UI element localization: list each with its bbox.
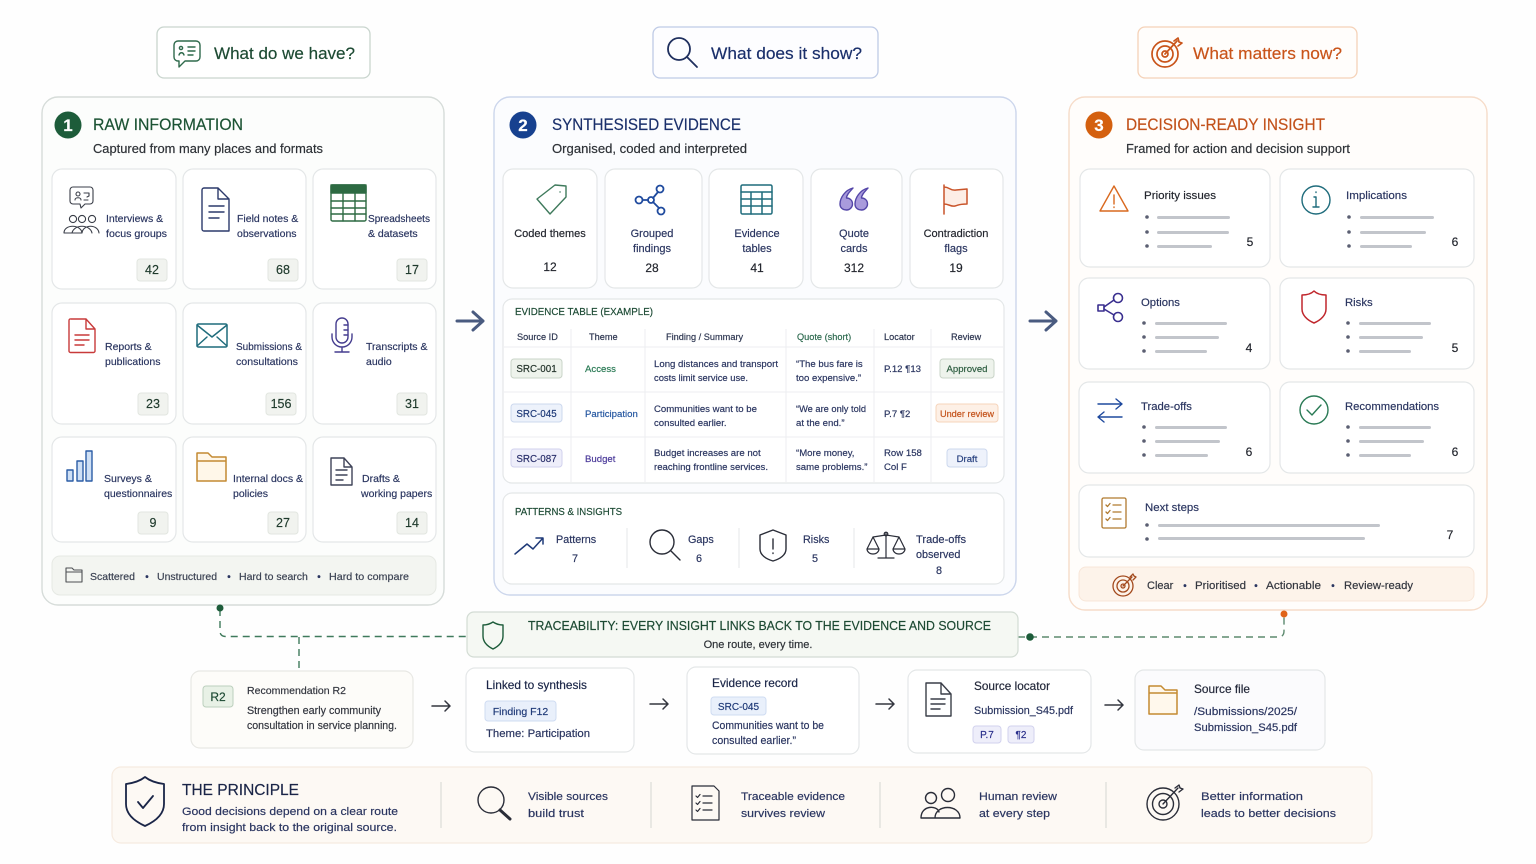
icon: speech bubble (174, 41, 200, 67)
icon: small target (1113, 574, 1136, 596)
card: contradiction flags: Contradiction (924, 228, 988, 240)
icon: tag (537, 185, 566, 214)
label: Interviews & (106, 213, 163, 225)
icon: bar chart (67, 451, 92, 481)
strip: problems: Scattered (90, 571, 135, 583)
stat: trade-offs: Trade-offs (916, 534, 967, 546)
card: contradiction flags: 19 (949, 261, 963, 275)
row SRC-045: Participation (585, 409, 638, 420)
card: drafts: 14 (405, 516, 419, 530)
item: human review: Human review (979, 791, 1058, 803)
icon: source folder (1149, 686, 1177, 714)
row SRC-001: costs limit service use. (654, 373, 748, 384)
strip: qualities: • (1331, 580, 1335, 592)
number badge 3 (1086, 112, 1112, 138)
flow card: linked to synthesis: Linked to synthesis (486, 679, 587, 692)
item: traceable evidence: survives review (741, 808, 826, 820)
icon: principle target (1147, 785, 1183, 820)
card: submissions (183, 303, 306, 424)
card: quote cards: 312 (844, 261, 864, 275)
item: human review: at every step (979, 808, 1050, 820)
flow card: evidence record: Evidence record (712, 677, 798, 690)
card: drafts (313, 437, 436, 542)
stat: patterns (515, 534, 597, 565)
item: traceable evidence: Traceable evidence (741, 791, 845, 803)
flow card: evidence record (687, 667, 859, 754)
row SRC-087: reaching frontline services. (654, 462, 768, 473)
card: field notes (183, 169, 306, 289)
flow card: linked to synthesis: Theme: Participation (486, 728, 590, 740)
flow card: source file: Submission_S45.pdf (1194, 722, 1297, 734)
arrow: raw to synthesised (457, 312, 483, 330)
table header: Locator (884, 332, 915, 342)
flow arrow 2 (650, 699, 668, 709)
icon: shield alert (760, 530, 786, 561)
subheading: Framed for action and decision support (1126, 141, 1350, 156)
row SRC-045: Under review (940, 409, 994, 419)
heading: RAW INFORMATION (93, 115, 243, 134)
stat: trade-offs: 8 (936, 565, 942, 577)
card: recommendations: Recommendations (1345, 401, 1439, 413)
label: What does it show? (711, 44, 862, 63)
heading: SYNTHESISED EVIDENCE (552, 115, 741, 134)
banner title: TRACEABILITY: EVERY INSIGHT LINKS BACK TO THE EVIDENCE AND SOURCE (528, 619, 991, 633)
card: spreadsheets: 17 (405, 263, 419, 277)
icon: red shield (1302, 291, 1326, 323)
panel: the principle (112, 767, 1372, 843)
table header: Quote (short) (797, 332, 851, 342)
icon: flag (944, 185, 967, 214)
stat: trade-offs (867, 532, 967, 577)
strip: qualities: Clear (1147, 580, 1174, 592)
row SRC-087: same problems.” (796, 462, 867, 473)
row SRC-045: at the end.” (796, 418, 845, 429)
card: interviews (52, 169, 176, 289)
number badge 1: 1 (63, 116, 73, 135)
chip R2: R2 (210, 690, 226, 704)
icon: red document (69, 319, 95, 352)
icon: folder (197, 453, 226, 481)
card: quote cards: Quote (839, 228, 869, 240)
card: evidence tables: Evidence (734, 228, 780, 240)
card: implications (1280, 169, 1474, 267)
card: options: Options (1141, 297, 1180, 309)
stat: risks (760, 530, 830, 565)
row SRC-087: Budget (585, 454, 616, 465)
icon: small folder (66, 568, 82, 582)
card: evidence tables: 41 (750, 261, 764, 275)
card: recommendations (1280, 382, 1474, 473)
icon: principle checklist (692, 786, 719, 820)
card: next steps: Next steps (1145, 502, 1199, 514)
stat: risks: Risks (803, 534, 830, 546)
row SRC-045: Communities want to be (654, 404, 757, 415)
row SRC-001: Long distances and transport (654, 359, 778, 370)
panel: decision-ready insight (1069, 97, 1487, 610)
card: quote cards: cards (841, 243, 868, 255)
icon: branching options (1098, 294, 1122, 322)
principle heading: THE PRINCIPLE (182, 782, 299, 799)
flow arrow 4 (1105, 700, 1123, 710)
row SRC-087: Col F (884, 462, 907, 473)
strip: problems (52, 556, 436, 595)
strip: problems: Hard to search (239, 571, 308, 583)
icon: microphone (332, 318, 352, 352)
icon: magnifier (668, 38, 697, 67)
flow card: recommendation R2: Strengthen early community (247, 705, 382, 717)
table header: Source ID (517, 332, 558, 342)
strip: qualities (1079, 567, 1474, 601)
card: risks: 5 (1452, 341, 1459, 355)
item: human review (921, 788, 1058, 820)
strip: problems: • (145, 571, 149, 583)
stat: gaps: 6 (696, 553, 702, 565)
flow card: source locator (908, 670, 1091, 753)
card: evidence tables (709, 169, 803, 288)
icon: scales (867, 532, 905, 558)
row SRC-087: SRC-087 (516, 454, 557, 465)
card: grouped findings: Grouped (631, 228, 673, 240)
number badge 2: 2 (518, 116, 528, 135)
card: internal docs: policies (233, 488, 268, 500)
flow card: recommendation R2 (191, 671, 413, 748)
strip: qualities: • (1183, 580, 1187, 592)
card: coded themes: 12 (543, 260, 557, 274)
row SRC-087: Draft (957, 454, 978, 465)
heading: DECISION-READY INSIGHT (1126, 115, 1325, 134)
card: contradiction flags (910, 169, 1003, 288)
card: spreadsheets (313, 169, 436, 289)
row SRC-001: “The bus fare is (796, 359, 863, 370)
icon: trend line (515, 538, 543, 554)
flow card: evidence record: consulted earlier.” (712, 735, 796, 747)
card: surveys: 9 (150, 516, 157, 530)
icon: checklist (1102, 498, 1126, 528)
card: reports: publications (105, 356, 160, 368)
card: quote cards (811, 169, 902, 288)
row SRC-001: too expensive.” (796, 373, 861, 384)
flow card: source file (1135, 670, 1325, 750)
card: grouped findings: 28 (645, 261, 659, 275)
panel: evidence table (503, 299, 1004, 483)
icon: check circle (1300, 396, 1328, 424)
flow arrow 3 (876, 699, 894, 709)
icon: warning triangle (1100, 186, 1128, 211)
flow card: source file: /Submissions/2025/ (1194, 706, 1297, 718)
flow card: source locator: Source locator (974, 680, 1050, 693)
principle text: Good decisions depend on a clear route (182, 806, 398, 818)
stat: patterns: 7 (572, 553, 578, 565)
icon: green shield (483, 622, 503, 649)
panel: synthesised evidence (494, 97, 1016, 595)
row SRC-045: SRC-045 (516, 409, 557, 420)
icon: spreadsheet (331, 185, 366, 221)
row SRC-087: “More money, (796, 448, 854, 459)
subheading: Captured from many places and formats (93, 141, 323, 156)
card: transcripts: 31 (405, 397, 419, 411)
number badge 1 (54, 112, 82, 138)
icon: principle magnifier (478, 787, 510, 819)
connector node: left (216, 604, 224, 612)
panel: the principle: from insight back to the original source. (182, 822, 397, 834)
traceability banner (467, 612, 1018, 657)
connector node: middle (1026, 633, 1034, 641)
row SRC-045: consulted earlier. (654, 418, 727, 429)
item: visible sources: Visible sources (528, 791, 608, 803)
card: surveys: questionnaires (104, 488, 172, 500)
card: submissions: 156 (271, 397, 291, 411)
card: drafts: Drafts & (362, 473, 400, 485)
card: surveys (52, 437, 176, 542)
card: submissions: Submissions & (236, 341, 302, 353)
icon: network (636, 186, 664, 214)
flow card: recommendation R2: consultation in service planning. (247, 720, 397, 732)
strip: problems: Hard to compare (329, 571, 409, 583)
flow card: evidence record: Communities want to be (712, 720, 824, 732)
card: internal docs (183, 437, 306, 542)
icon: quote marks (840, 188, 868, 210)
stat: trade-offs: observed (916, 549, 960, 561)
card: field notes: Field notes & (237, 213, 298, 225)
panel: patterns and insights (503, 493, 1004, 584)
icon: table (741, 185, 772, 214)
card: next steps: 7 (1447, 528, 1454, 542)
arrow: synthesised to decision-ready (1030, 312, 1056, 330)
strip: qualities: • (1254, 580, 1258, 592)
banner subtitle: One route, every time. (704, 639, 812, 651)
question pill: what do we have (157, 27, 370, 78)
card: risks: Risks (1345, 297, 1373, 309)
chip page: P.7 (980, 730, 994, 741)
icon: principle shield (126, 777, 164, 826)
card: implications: Implications (1346, 190, 1407, 202)
question pill: what matters now (1138, 27, 1357, 78)
icon: target (1152, 38, 1182, 67)
card: internal docs: 27 (276, 516, 290, 530)
stat: risks: 5 (812, 553, 818, 565)
table header: Review (951, 332, 981, 342)
card: submissions: consultations (236, 356, 298, 368)
card: field notes: 68 (276, 263, 290, 277)
card: trade-offs: Trade-offs (1141, 401, 1192, 413)
card: trade-offs (1079, 382, 1270, 473)
stat: patterns: Patterns (556, 534, 597, 546)
icon: draft document (331, 458, 352, 485)
card: field notes: observations (237, 228, 297, 240)
card: internal docs: Internal docs & (233, 473, 303, 485)
icon: swap arrows (1098, 399, 1122, 422)
card: coded themes (503, 169, 597, 288)
card: priority issues: 5 (1247, 235, 1254, 249)
card: coded themes: Coded themes (514, 228, 586, 240)
subheading: Organised, coded and interpreted (552, 141, 747, 156)
flow arrow 1 (432, 701, 450, 711)
row SRC-045: P.7 ¶2 (884, 409, 910, 420)
card: risks (1280, 278, 1474, 369)
card: transcripts: Transcripts & (366, 341, 427, 353)
chip R2 (203, 686, 233, 707)
card: grouped findings: findings (633, 243, 671, 255)
flow card: recommendation R2: Recommendation R2 (247, 686, 346, 697)
row SRC-001: Access (585, 364, 616, 375)
card: trade-offs: 6 (1246, 445, 1253, 459)
card: reports: Reports & (105, 341, 152, 353)
icon: document (202, 188, 229, 231)
panel: raw information (42, 97, 444, 605)
icon: locator document (926, 683, 951, 716)
card: spreadsheets: & datasets (368, 228, 418, 240)
chip finding F12 (485, 701, 556, 721)
item: better information (1147, 785, 1336, 820)
row SRC-001 (511, 359, 994, 384)
card: surveys: Surveys & (104, 473, 152, 485)
icon: people (921, 788, 960, 818)
strip: problems: • (227, 571, 231, 583)
strip: qualities: Actionable (1266, 580, 1321, 592)
row SRC-001: P.12 ¶13 (884, 364, 921, 375)
card: transcripts: audio (366, 356, 392, 368)
item: traceable evidence (692, 786, 845, 820)
card: reports (52, 303, 176, 424)
count: 42 (145, 263, 159, 277)
icon: gaps magnifier (650, 530, 680, 560)
chip finding F12: Finding F12 (493, 706, 548, 718)
icon: interview group (64, 187, 99, 233)
card: contradiction flags: flags (944, 243, 968, 255)
table header: Finding / Summary (666, 332, 744, 342)
dashed trace connectors (216, 604, 1288, 671)
item: visible sources: build trust (528, 808, 585, 820)
chip paragraph: ¶2 (1016, 730, 1027, 741)
flow card: source locator: Submission_S45.pdf (974, 705, 1073, 717)
stat: gaps: Gaps (688, 534, 714, 546)
card: evidence tables: tables (742, 243, 772, 255)
card: grouped findings (605, 169, 702, 288)
card: spreadsheets: Spreadsheets (368, 213, 430, 225)
card: priority issues (1080, 169, 1270, 267)
stat: gaps (650, 530, 714, 565)
card: next steps (1079, 485, 1474, 557)
strip: problems: • (317, 571, 321, 583)
chip SRC-045: SRC-045 (718, 702, 759, 713)
connector node: right (1280, 610, 1288, 618)
question pill: what does it show (653, 27, 878, 78)
strip: qualities: Review-ready (1344, 580, 1414, 592)
card: options: 4 (1246, 341, 1253, 355)
patterns heading: PATTERNS & INSIGHTS (515, 507, 622, 518)
card: interviews: focus groups (106, 228, 167, 240)
row SRC-045 (511, 404, 998, 429)
strip: qualities: Prioritised (1195, 580, 1246, 592)
table header (517, 332, 981, 342)
card: options (1079, 278, 1270, 369)
item: better information: Better information (1201, 791, 1303, 803)
card: implications: 6 (1452, 235, 1459, 249)
number badge 3: 3 (1094, 116, 1104, 135)
flow card: linked to synthesis (466, 668, 634, 752)
label: What matters now? (1193, 44, 1342, 63)
chip page (973, 726, 1001, 743)
card: recommendations: 6 (1452, 445, 1459, 459)
row SRC-045: “We are only told (796, 404, 866, 415)
row SRC-087: Row 158 (884, 448, 922, 459)
chip SRC-045 (711, 697, 766, 715)
item: visible sources (478, 787, 608, 820)
strip: problems: Unstructured (157, 571, 217, 583)
row SRC-001: SRC-001 (516, 364, 557, 375)
icon: envelope (197, 324, 227, 347)
number badge 2 (510, 112, 536, 138)
card: priority issues: Priority issues (1144, 190, 1216, 202)
flow card: source file: Source file (1194, 683, 1250, 696)
icon: info circle (1302, 186, 1330, 214)
item: better information: leads to better decisions (1201, 808, 1336, 820)
card: reports: 23 (146, 397, 160, 411)
row SRC-087: Budget increases are not (654, 448, 761, 459)
row SRC-001: Approved (946, 364, 988, 375)
card: transcripts (313, 303, 436, 424)
table heading: EVIDENCE TABLE (EXAMPLE) (515, 307, 653, 318)
card: drafts: working papers (360, 488, 432, 500)
row SRC-087 (511, 448, 987, 473)
chip paragraph (1008, 726, 1034, 743)
table header: Theme (589, 332, 618, 342)
label: What do we have? (214, 44, 355, 63)
